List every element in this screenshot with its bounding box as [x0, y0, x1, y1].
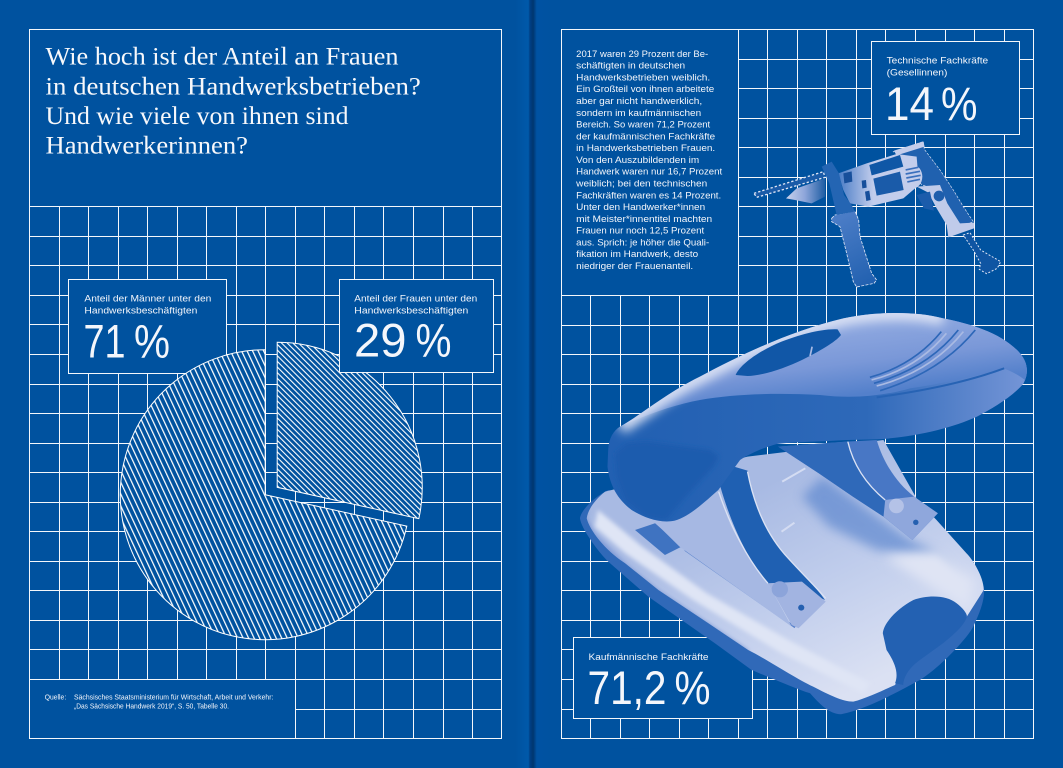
body text: Frauen nur noch 12,5 Prozent [576, 226, 705, 236]
left page grid [30, 30, 502, 738]
pie slice: women 29 percent [277, 342, 422, 519]
punch base top surface [587, 440, 984, 702]
pie chart [120, 342, 422, 640]
callout: commercial specialists: 71,2 [588, 661, 666, 714]
source note: Quelle: [45, 695, 66, 702]
thumb hole [883, 597, 967, 685]
body text: niedriger der Frauenanteil. [576, 261, 693, 271]
trigger [917, 192, 934, 211]
body text: mit Meister*innentitel machten [576, 214, 712, 224]
first arm dark band [720, 467, 825, 600]
second arm [778, 440, 938, 540]
grip button [934, 191, 944, 201]
callout: commercial specialists: % [674, 661, 710, 714]
base shading [581, 477, 975, 693]
small switches [843, 171, 871, 201]
center shadow [800, 474, 948, 560]
callout: share of women: Anteil der Frauen unter den [354, 294, 477, 305]
body text: fikation im Handwerk, desto [576, 249, 698, 259]
dark panel top [869, 155, 903, 175]
drill rear housing [893, 142, 973, 227]
collar [822, 162, 855, 215]
body text [575, 49, 723, 271]
callout: technical specialists [872, 42, 1020, 134]
light grip [917, 185, 974, 237]
body text: Bereich. So waren 71,2 Prozent [576, 120, 711, 130]
channel groove [685, 550, 795, 627]
first arm plate [768, 582, 826, 628]
body text: aus. Sprich: je höher die Quali- [576, 237, 709, 247]
handle rear dark crease [877, 368, 1004, 397]
body text: Handwerksbetrieben weiblich. [576, 72, 710, 82]
body text: aber gar nicht handwerklich, [576, 96, 702, 106]
rear cord guard [963, 233, 1001, 274]
callout: share of women [340, 280, 494, 372]
body text: Fachkräften waren es 14 Prozent. [576, 190, 721, 200]
body text: Von den Auszubildenden im [576, 155, 700, 165]
punch base rim [580, 490, 984, 714]
title: Und wie viele von ihnen sind [46, 101, 349, 130]
source note [45, 695, 273, 711]
handle left lobe [640, 444, 716, 519]
body text: Unter den Handwerker*innen [576, 202, 705, 212]
source note: „Das Sächsische Handwerk 2019“, S. 50, Tabelle 30. [74, 704, 229, 711]
punch handle [608, 313, 1027, 522]
second arm highlight [848, 442, 885, 500]
title: in deutschen Handwerksbetrieben? [46, 72, 421, 100]
handle upper face [620, 313, 1027, 427]
body text: der kaufmännischen Fachkräfte [576, 131, 715, 141]
callout: share of women: 29 [354, 314, 406, 367]
title: Handwerkerinnen? [46, 131, 248, 160]
callout: share of men [68, 280, 226, 374]
side handle [832, 211, 877, 287]
top vents [894, 141, 925, 155]
handle finger opening [736, 329, 841, 376]
right page grid [562, 30, 1034, 738]
second arm inner [778, 442, 912, 539]
handle ribs [870, 330, 975, 391]
round vent [902, 165, 922, 189]
first arm highlights [719, 472, 826, 598]
center panel slit [782, 468, 805, 532]
source note: Sächsisches Staatsministerium für Wirtschaft, Arbeit und Verkehr: [74, 695, 273, 702]
body text: Ein Großteil von ihnen arbeitete [576, 84, 714, 94]
left arm side plate [656, 493, 792, 627]
callout: commercial specialists [574, 638, 752, 718]
second arm rivet [889, 499, 919, 525]
callout: share of men: 71 [84, 315, 126, 368]
callout: technical specialists: (Gesellinnen) [887, 67, 947, 78]
chuck [786, 178, 825, 203]
highlight band [593, 510, 846, 678]
second arm plate [883, 497, 938, 540]
body text: sondern im kaufmännischen [576, 108, 701, 118]
drill body [838, 154, 919, 207]
pie slice: men 71 percent [120, 350, 407, 640]
icon: hole punch [580, 307, 1040, 714]
first arm rivet [772, 581, 804, 611]
callout: share of men: Anteil der Männer unter den [84, 294, 211, 305]
callout: share of men: Handwerksbeschäftigten [84, 306, 197, 317]
callout: share of women: Handwerksbeschäftigten [354, 306, 468, 317]
body text: weiblich; bei den technischen [575, 178, 707, 188]
callout: technical specialists: Technische Fachkräfte [887, 56, 988, 67]
body text: schäftigten in deutschen [576, 61, 685, 71]
opening inner tick [810, 347, 812, 356]
right highlight [886, 546, 972, 602]
body text: Handwerk waren nur 16,7 Prozent [576, 167, 723, 177]
channel shadow [635, 523, 682, 555]
callout: share of women: % [416, 314, 452, 367]
title: Wie hoch ist der Anteil an Frauen [46, 41, 399, 70]
handle lower face [608, 313, 1027, 522]
body text: in Handwerksbetrieben Frauen. [576, 143, 715, 153]
callout: technical specialists: % [941, 77, 978, 130]
edge shadow [587, 514, 750, 650]
display window [873, 172, 904, 196]
drill bit [754, 172, 825, 197]
icon: power drill [754, 141, 1001, 287]
title [46, 41, 421, 160]
top edge highlight [620, 313, 943, 427]
callout: technical specialists: 14 [885, 77, 934, 130]
body text: 2017 waren 29 Prozent der Be- [576, 49, 708, 59]
callout: commercial specialists: Kaufmännische Fachkräfte [588, 652, 708, 663]
callout: share of men: % [134, 315, 170, 368]
